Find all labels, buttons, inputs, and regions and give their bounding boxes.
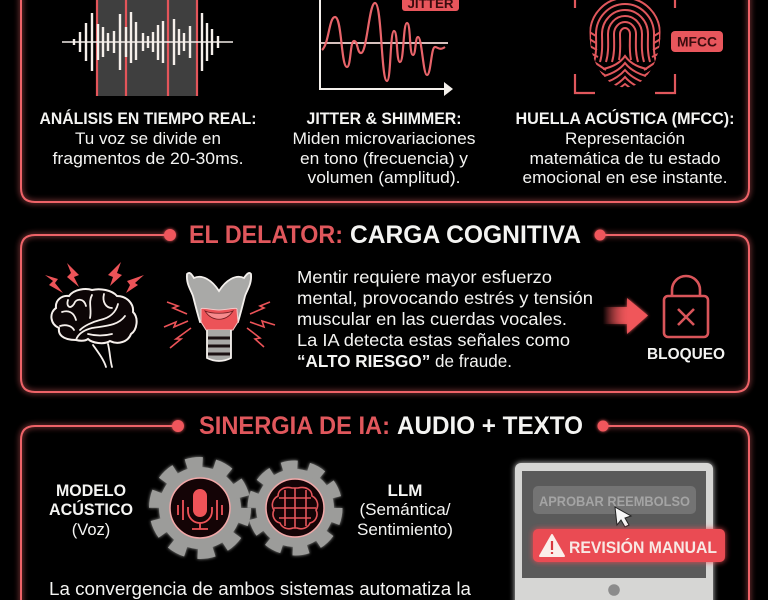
heading: sinergia de ia: SINERGIA DE IA: — [199, 412, 390, 440]
text block: carga cognitiva: mental, provocando estrés y tensión — [297, 288, 593, 308]
text block: convergencia: La convergencia de ambos sistemas automatiza la — [49, 578, 472, 599]
icon: larynx with sparks — [164, 273, 275, 361]
text block: carga cognitiva: muscular en las cuerdas vocales. — [297, 309, 567, 329]
icon: scan brackets — [575, 0, 675, 93]
heading: audio + texto: AUDIO + TEXTO — [397, 412, 583, 440]
button: aprobar reembolso — [533, 486, 696, 514]
text block: carga cognitiva: La IA detecta estas señales como — [297, 330, 570, 350]
panel: análisis de voz — [21, 0, 749, 202]
icon: gear with microphone — [156, 464, 244, 552]
label: llm: Sentimiento) — [357, 521, 453, 539]
banner: revisión manual — [533, 529, 725, 562]
text block: huella acústica — [516, 109, 734, 187]
text block: análisis en tiempo real: ANÁLISIS EN TIEMPO REAL: — [40, 109, 256, 128]
text block: jitter y shimmer — [292, 109, 476, 187]
icon: jitter chart — [320, 0, 453, 96]
icon: fingerprint — [590, 0, 660, 88]
text block: huella acústica: Representación — [565, 130, 685, 148]
text block: jitter y shimmer: Miden microvariaciones — [292, 130, 476, 148]
text block: carga cognitiva: “ALTO RIESGO” de fraude. — [297, 351, 512, 371]
icon: lock — [664, 276, 708, 337]
label: bloqueo: BLOQUEO — [647, 346, 725, 363]
text block: jitter y shimmer: en tono (frecuencia) y — [300, 150, 469, 168]
label: llm: LLM — [388, 481, 422, 500]
icon: monitor alert — [515, 463, 725, 600]
panel: sinergia de ia — [21, 412, 749, 600]
badge: mfcc — [671, 31, 723, 52]
text block: carga cognitiva — [297, 267, 593, 371]
label: modelo acústico — [49, 481, 133, 539]
text block: análisis en tiempo real: fragmentos de 20-30ms. — [52, 150, 244, 168]
label: modelo acústico: ACÚSTICO — [49, 500, 133, 519]
text block: huella acústica: HUELLA ACÚSTICA (MFCC): — [516, 109, 734, 128]
text block: jitter y shimmer: volumen (amplitud). — [308, 169, 460, 187]
label: modelo acústico: MODELO — [56, 481, 126, 500]
icon: cursor — [615, 507, 631, 527]
icon: waveform segmented — [62, 0, 233, 96]
icon: brain with bolts — [45, 262, 144, 367]
text block: jitter y shimmer: JITTER & SHIMMER: — [306, 109, 462, 128]
banner: revisión manual: REVISIÓN MANUAL — [569, 538, 717, 557]
text block: análisis en tiempo real — [40, 109, 256, 168]
button: aprobar reembolso: APROBAR REEMBOLSO — [539, 493, 690, 509]
label: modelo acústico: (Voz) — [72, 521, 110, 539]
text block: huella acústica: emocional en ese instante. — [522, 169, 728, 187]
text block: carga cognitiva: Mentir requiere mayor esfuerzo — [297, 267, 552, 287]
icon: gear with neural brain — [254, 467, 336, 549]
text block: huella acústica: matemática de tu estado — [530, 150, 720, 168]
panel: el delator — [21, 221, 749, 392]
label: llm: (Semántica/ — [360, 501, 451, 519]
heading: el delator: EL DELATOR: — [189, 221, 343, 249]
heading: carga cognitiva: CARGA COGNITIVA — [350, 221, 581, 249]
text block: análisis en tiempo real: Tu voz se divide en — [75, 130, 221, 148]
label: llm — [357, 481, 453, 539]
arrow — [603, 298, 648, 334]
badge: mfcc: MFCC — [677, 34, 717, 50]
